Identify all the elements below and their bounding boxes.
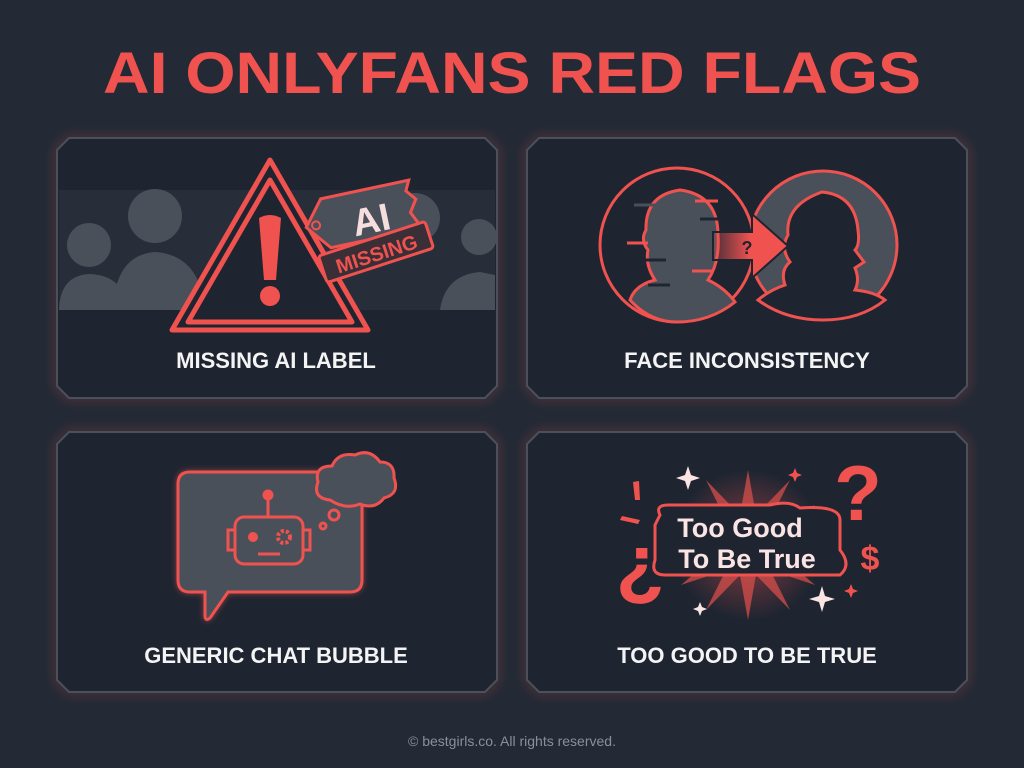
icon: missing stamp: MISSING — [333, 231, 420, 278]
icon: sparkles — [676, 466, 858, 616]
icon: text badge — [654, 503, 846, 575]
title: AI ONLYFANS RED FLAGS — [103, 41, 921, 106]
icon: speech bubble — [178, 472, 362, 619]
panel: too good to be true — [527, 432, 967, 692]
icon: text badge: Too Good — [677, 513, 803, 543]
panel: missing ai label — [57, 138, 497, 398]
panel label: TOO GOOD TO BE TRUE — [617, 643, 877, 668]
icon: question marks and dollar — [616, 449, 882, 620]
icon: robot — [228, 491, 310, 564]
panel: face inconsistency — [527, 138, 967, 398]
icon: starburst — [668, 470, 828, 620]
icon: thought cloud — [316, 453, 396, 529]
icon: arrow with question — [713, 214, 788, 278]
panel label: GENERIC CHAT BUBBLE — [144, 643, 408, 668]
icon: question marks and dollar: ? — [834, 449, 882, 537]
icon: arrow with question: ? — [742, 238, 752, 258]
panel label: MISSING AI LABEL — [176, 348, 376, 373]
icon: AI tag — [301, 180, 423, 255]
icon: question marks and dollar: ? — [616, 531, 664, 620]
icon: warning triangle — [172, 160, 368, 330]
icon: question marks and dollar: $ — [861, 540, 880, 578]
icon: AI tag: AI — [348, 196, 394, 245]
icon: text badge: To Be True — [678, 544, 816, 574]
icon: missing stamp — [318, 221, 434, 283]
icon: left face circle — [600, 168, 754, 322]
panel label: FACE INCONSISTENCY — [624, 348, 870, 373]
icon: right face circle — [749, 171, 897, 320]
icon: people silhouettes — [59, 189, 497, 310]
panel: generic chat bubble — [57, 432, 497, 692]
footer: © bestgirls.co. All rights reserved. — [408, 733, 616, 749]
